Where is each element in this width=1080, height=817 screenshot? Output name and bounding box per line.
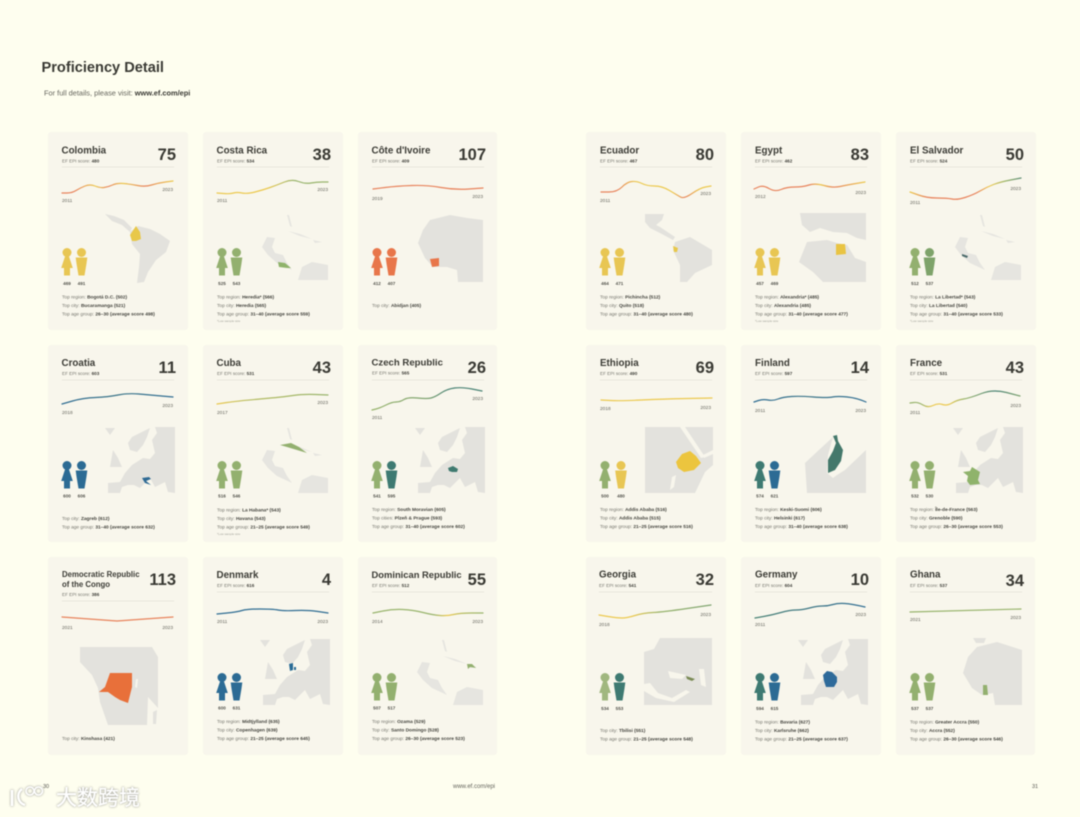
top results bbox=[217, 719, 310, 742]
footer: right page number: 31 bbox=[1032, 784, 1038, 790]
icon: male bbox=[76, 461, 87, 488]
female score: 412 bbox=[373, 281, 381, 286]
top results bbox=[600, 294, 693, 318]
male score: 543 bbox=[233, 281, 241, 286]
female score: 594 bbox=[756, 706, 764, 711]
start year: 2011 bbox=[910, 410, 921, 416]
top results: Top age group: 31–40 (average score 533) bbox=[910, 312, 1003, 318]
start year: 2011 bbox=[910, 200, 921, 206]
EPI score: EF EPI score: 512 bbox=[372, 583, 410, 588]
male score: 491 bbox=[78, 281, 86, 286]
female score: 541 bbox=[373, 494, 381, 498]
top results: Top region: Greater Accra (550) bbox=[910, 720, 980, 726]
rank: 43 bbox=[313, 359, 331, 377]
start year: 2011 bbox=[372, 415, 383, 421]
map: Central Africa bbox=[80, 647, 158, 725]
female score: 532 bbox=[911, 494, 919, 498]
end year: 2023 bbox=[855, 612, 866, 618]
end year: 2023 bbox=[317, 187, 328, 193]
map: Central America bbox=[955, 215, 1021, 280]
end year: 2023 bbox=[855, 408, 866, 414]
card: Ecuador bbox=[586, 132, 726, 330]
watermark text: 大数跨境 bbox=[56, 782, 140, 812]
map: West Africa bbox=[418, 215, 483, 282]
icon: female bbox=[371, 673, 383, 700]
map: South America bbox=[105, 214, 170, 283]
top results bbox=[62, 294, 155, 318]
end year: 2023 bbox=[1010, 615, 1021, 621]
top results: Top region: Pichincha (512) bbox=[600, 294, 661, 300]
top results: Top age group: 31–40 (average score 632) bbox=[62, 524, 155, 530]
country name: France bbox=[910, 358, 943, 369]
rank: 11 bbox=[159, 359, 176, 377]
footer: url: www.ef.com/epi bbox=[452, 784, 495, 790]
top results bbox=[910, 294, 1003, 318]
trend line bbox=[373, 185, 483, 189]
icon: male bbox=[615, 461, 627, 488]
top results: Top region: La Libertad* (543) bbox=[910, 294, 976, 300]
footnote: *Low sample size bbox=[217, 319, 241, 323]
male score: 517 bbox=[388, 706, 396, 710]
start year: 2021 bbox=[62, 625, 73, 631]
icon: female bbox=[909, 673, 921, 700]
top results: Top region: Heredia* (566) bbox=[217, 294, 274, 300]
top results bbox=[755, 720, 848, 742]
start year: 2018 bbox=[599, 622, 610, 628]
footnote: *Low sample size bbox=[755, 319, 779, 323]
trend line bbox=[62, 181, 173, 193]
country name: Germany bbox=[755, 570, 798, 580]
icon: male bbox=[924, 673, 935, 700]
EPI score: EF EPI score: 524 bbox=[910, 158, 948, 164]
rank: 50 bbox=[1006, 146, 1024, 164]
end year: 2023 bbox=[700, 405, 711, 411]
icon: male bbox=[769, 673, 780, 700]
female score: 457 bbox=[756, 281, 764, 286]
start year: 2018 bbox=[62, 410, 73, 416]
start year: 2011 bbox=[600, 198, 611, 204]
icon: female bbox=[371, 461, 383, 488]
top results: Top region: South Moravian (605) bbox=[372, 507, 446, 513]
card: Egypt bbox=[741, 132, 881, 330]
rank: 38 bbox=[313, 146, 331, 164]
map: Europe bbox=[260, 639, 330, 705]
EPI score: EF EPI score: 490 bbox=[600, 371, 638, 376]
trend line bbox=[910, 178, 1021, 199]
start year: 2011 bbox=[755, 622, 766, 628]
icon: female bbox=[61, 461, 73, 488]
female score: 525 bbox=[218, 281, 226, 286]
top results: Top age group: 21–25 (average score 645) bbox=[217, 736, 310, 742]
icon: male bbox=[614, 248, 625, 276]
male score: 407 bbox=[388, 281, 396, 286]
top results: Top region: Keski-Suomi (606) bbox=[755, 507, 822, 513]
rank: 69 bbox=[696, 359, 714, 377]
map: South America bbox=[645, 214, 712, 282]
card: Germany bbox=[741, 557, 881, 755]
start year: 2012 bbox=[755, 194, 766, 200]
card: Ethiopia bbox=[586, 345, 726, 542]
map: Caucasus bbox=[644, 638, 712, 705]
top results: Top city: Abidjan (405) bbox=[372, 303, 421, 309]
top results: Top age group: 31–40 (average score 480) bbox=[600, 312, 693, 318]
country name: Cuba bbox=[216, 358, 242, 369]
map: Europe bbox=[953, 427, 1023, 493]
top results bbox=[755, 507, 848, 530]
male score: 546 bbox=[233, 494, 241, 498]
icon: female bbox=[754, 673, 766, 700]
map: East Africa bbox=[645, 427, 713, 493]
trend line bbox=[601, 398, 712, 401]
trend line bbox=[754, 182, 865, 191]
top results: Top age group: 31–40 (average score 638) bbox=[755, 524, 848, 530]
map: Europe bbox=[105, 427, 175, 493]
trend line bbox=[62, 617, 173, 621]
top results: Top age group: 26–30 (average score 546) bbox=[910, 736, 1003, 742]
icon: female bbox=[909, 248, 921, 276]
trend line bbox=[910, 391, 1020, 407]
map: Central America bbox=[262, 215, 328, 280]
country name bbox=[62, 570, 140, 589]
trend line bbox=[217, 609, 328, 614]
title: Proficiency Detail bbox=[42, 60, 164, 76]
end year: 2023 bbox=[472, 619, 483, 625]
top results: Top region: Île-de-France (563) bbox=[910, 505, 978, 513]
rank: 75 bbox=[158, 146, 176, 164]
EPI score: EF EPI score: 603 bbox=[62, 371, 100, 376]
top results: Top age group: 31–40 (average score 477) bbox=[755, 312, 848, 318]
start year: 2011 bbox=[62, 198, 73, 204]
EPI score: EF EPI score: 565 bbox=[372, 370, 410, 376]
top results: Top city: Kinshasa (421) bbox=[62, 736, 115, 742]
country name: Democratic Republic bbox=[62, 570, 140, 579]
card: Czech Republic bbox=[358, 345, 497, 542]
top results: Top age group: 31–40 (average score 602) bbox=[372, 524, 465, 530]
top results: Top cities: Plzeň & Prague (593) bbox=[372, 516, 443, 522]
female score: 537 bbox=[911, 706, 919, 711]
icon: male bbox=[386, 248, 397, 276]
rank: 32 bbox=[696, 571, 714, 589]
male score: 537 bbox=[926, 281, 934, 286]
top results bbox=[910, 505, 1003, 530]
top results: Top age group: 21–25 (average score 549) bbox=[217, 524, 310, 530]
trend line bbox=[372, 388, 482, 410]
footer: left page number: 30 bbox=[43, 784, 49, 790]
top results bbox=[372, 719, 465, 742]
male score: 553 bbox=[616, 706, 624, 711]
EPI score: EF EPI score: 604 bbox=[755, 583, 793, 588]
end year: 2023 bbox=[1010, 403, 1021, 409]
icon: female bbox=[909, 461, 921, 488]
EPI score: EF EPI score: 386 bbox=[62, 592, 100, 597]
female score: 516 bbox=[218, 494, 226, 498]
country name: Dominican Republic bbox=[372, 569, 462, 580]
start year: 2018 bbox=[600, 406, 611, 412]
end year: 2023 bbox=[317, 619, 328, 625]
card: Croatia bbox=[48, 345, 188, 542]
icon: female bbox=[216, 673, 228, 700]
start year: 2019 bbox=[372, 196, 383, 202]
male score: 615 bbox=[771, 706, 779, 711]
trend line bbox=[754, 396, 866, 402]
top results bbox=[217, 294, 310, 318]
top results: Top age group: 21–25 (average score 548) bbox=[600, 736, 693, 742]
EPI score: EF EPI score: 462 bbox=[755, 158, 793, 164]
trend line bbox=[755, 603, 865, 618]
card: Georgia bbox=[586, 557, 726, 755]
end year: 2023 bbox=[700, 612, 711, 618]
top results: Top region: Addis Ababa (516) bbox=[600, 507, 667, 513]
trend line bbox=[217, 394, 328, 404]
top results: Top city: Accra (552) bbox=[910, 728, 955, 734]
female score: 500 bbox=[601, 494, 609, 498]
top results: Top region: Bogotá D.C. (502) bbox=[62, 294, 127, 300]
female score: 469 bbox=[63, 281, 71, 286]
EPI score: EF EPI score: 534 bbox=[217, 158, 255, 164]
EPI score: EF EPI score: 537 bbox=[910, 583, 948, 588]
top results: Top age group: 26–30 (average score 523) bbox=[372, 736, 465, 742]
top results: Top city: Helsinki (617) bbox=[755, 516, 805, 522]
rank: 43 bbox=[1006, 359, 1024, 377]
card: Côte d'Ivoire bbox=[358, 132, 497, 330]
top results bbox=[372, 507, 465, 530]
map: Caribbean bbox=[417, 640, 483, 705]
icon: male bbox=[386, 673, 397, 700]
icon: female bbox=[61, 248, 73, 276]
top results bbox=[755, 294, 848, 318]
top results: Top city: La Libertad (540) bbox=[910, 303, 968, 309]
top results bbox=[910, 720, 1003, 742]
footnote: *Low sample size bbox=[217, 532, 241, 536]
country name: Egypt bbox=[755, 146, 783, 156]
trend line bbox=[217, 180, 328, 194]
top results: Top age group: 26–30 (average score 553) bbox=[910, 524, 1003, 530]
top results: Top city: Alexandria (485) bbox=[755, 303, 811, 309]
top results: Top city: Karlsruhe (662) bbox=[755, 728, 809, 734]
rank: 14 bbox=[851, 359, 870, 377]
start year: 2021 bbox=[910, 617, 921, 623]
icon: male bbox=[231, 461, 242, 488]
female score: 507 bbox=[373, 706, 381, 710]
map: North Africa bbox=[799, 213, 866, 282]
card: Costa Rica bbox=[203, 132, 343, 330]
map: West Africa bbox=[963, 638, 1022, 705]
country name: Ecuador bbox=[600, 146, 639, 156]
male score: 471 bbox=[616, 281, 624, 286]
start year: 2017 bbox=[217, 410, 228, 416]
icon: male bbox=[924, 461, 935, 488]
female score: 574 bbox=[756, 494, 764, 498]
top results: Top region: Midtjylland (635) bbox=[217, 719, 280, 725]
card: Dominican Republic bbox=[358, 557, 497, 755]
icon: male bbox=[231, 248, 242, 276]
icon: male bbox=[231, 673, 242, 700]
rank: 4 bbox=[322, 571, 332, 589]
male score: 631 bbox=[233, 706, 241, 710]
trend line bbox=[599, 605, 711, 618]
end year: 2023 bbox=[162, 187, 173, 193]
rank: 26 bbox=[468, 359, 486, 377]
rank: 34 bbox=[1006, 572, 1025, 590]
top results: Top city: Havana (543) bbox=[217, 516, 266, 522]
EPI score: EF EPI score: 541 bbox=[599, 583, 637, 588]
icon: female bbox=[599, 461, 611, 488]
map: Europe bbox=[415, 427, 485, 493]
end year: 2023 bbox=[1010, 186, 1021, 192]
female score: 600 bbox=[63, 494, 71, 498]
country name: Croatia bbox=[62, 358, 96, 369]
footnote: *Low sample size bbox=[910, 319, 934, 323]
rank: 107 bbox=[458, 146, 486, 164]
icon: male bbox=[769, 248, 780, 276]
top results: Top age group: 21–25 (average score 637) bbox=[755, 736, 848, 742]
country name: of the Congo bbox=[62, 580, 110, 589]
EPI score: EF EPI score: 467 bbox=[600, 158, 638, 164]
country name: Costa Rica bbox=[216, 146, 268, 156]
top results: Top age group: 31–40 (average score 559) bbox=[217, 312, 310, 318]
end year: 2023 bbox=[472, 194, 483, 200]
start year: 2011 bbox=[217, 619, 228, 625]
start year: 2011 bbox=[755, 408, 766, 414]
trend line bbox=[910, 609, 1021, 612]
trend line bbox=[373, 609, 483, 616]
top results: Top region: La Habana* (543) bbox=[217, 508, 281, 514]
EPI score: EF EPI score: 409 bbox=[372, 158, 410, 164]
card: Ghana bbox=[896, 557, 1035, 755]
icon: male bbox=[614, 673, 625, 700]
EPI score: EF EPI score: 616 bbox=[217, 583, 255, 588]
icon: male bbox=[76, 248, 87, 276]
rank: 83 bbox=[851, 146, 869, 164]
icon: female bbox=[216, 248, 228, 276]
female score: 464 bbox=[601, 281, 609, 286]
end year: 2023 bbox=[700, 191, 711, 197]
male score: 595 bbox=[388, 494, 396, 498]
female score: 512 bbox=[911, 281, 919, 286]
male score: 621 bbox=[771, 494, 779, 498]
trend line bbox=[601, 181, 711, 198]
end year: 2023 bbox=[162, 625, 173, 631]
top results: Top city: Zagreb (612) bbox=[62, 516, 110, 522]
top results: Top region: Ozama (529) bbox=[372, 719, 426, 725]
icon: female bbox=[599, 673, 611, 700]
female score: 600 bbox=[218, 706, 226, 710]
male score: 530 bbox=[926, 494, 934, 498]
top results: Top city: Heredia (565) bbox=[217, 303, 266, 309]
start year: 2011 bbox=[217, 198, 228, 204]
icon: male bbox=[924, 248, 935, 276]
end year: 2023 bbox=[162, 403, 173, 409]
top results: Top city: Santo Domingo (528) bbox=[372, 728, 439, 734]
country name: Czech Republic bbox=[372, 358, 444, 368]
top results: Top region: Bavaria (627) bbox=[755, 720, 810, 726]
country name: Georgia bbox=[599, 570, 637, 580]
top results: Top city: Tbilisi (551) bbox=[600, 728, 646, 734]
rank: 55 bbox=[468, 571, 486, 589]
EPI score: EF EPI score: 531 bbox=[910, 371, 948, 376]
icon: female bbox=[599, 248, 611, 276]
female score: 534 bbox=[601, 706, 609, 711]
top results bbox=[600, 507, 693, 530]
card: Colombia bbox=[48, 132, 188, 330]
map: Europe bbox=[798, 639, 868, 705]
card: Cuba bbox=[203, 345, 343, 542]
top results: Top city: Copenhagen (639) bbox=[217, 728, 278, 734]
card: Democratic Republic of the Congo bbox=[48, 557, 188, 755]
EPI score: EF EPI score: 531 bbox=[217, 371, 255, 376]
subtitle: For full details, please visit: www.ef.com/epi bbox=[44, 88, 190, 98]
icon: female bbox=[216, 461, 228, 488]
rank: 80 bbox=[696, 146, 714, 164]
end year: 2023 bbox=[855, 190, 866, 196]
card: Denmark bbox=[203, 557, 343, 755]
card: France bbox=[896, 345, 1036, 542]
top results: Top city: Quito (518) bbox=[600, 303, 644, 309]
male score: 469 bbox=[771, 281, 779, 286]
country name: Finland bbox=[755, 358, 790, 369]
country name: El Salvador bbox=[910, 146, 964, 156]
top results bbox=[217, 508, 310, 530]
country name: Colombia bbox=[62, 146, 107, 156]
top results: Top city: Bucaramanga (521) bbox=[62, 303, 126, 309]
icon: watermark logo bbox=[12, 787, 42, 806]
country name: Ghana bbox=[910, 570, 941, 580]
icon: male bbox=[386, 461, 397, 488]
top results: Top age group: 26–30 (average score 498) bbox=[62, 312, 155, 318]
icon: female bbox=[754, 461, 766, 488]
top results: Top city: Addis Ababa (515) bbox=[600, 516, 661, 522]
map: Caribbean bbox=[262, 428, 328, 493]
EPI score: EF EPI score: 597 bbox=[755, 371, 793, 376]
country name: Ethiopia bbox=[600, 358, 639, 369]
country name: Denmark bbox=[216, 570, 259, 581]
end year: 2023 bbox=[472, 396, 483, 402]
icon: male bbox=[769, 461, 780, 488]
EPI score: EF EPI score: 480 bbox=[62, 158, 100, 164]
start year: 2014 bbox=[372, 619, 383, 625]
trend line bbox=[62, 394, 173, 404]
top results: Top age group: 21–25 (average score 516) bbox=[600, 524, 693, 530]
card: El Salvador bbox=[896, 132, 1036, 330]
icon: female bbox=[754, 248, 766, 276]
top results bbox=[62, 516, 155, 530]
card: Finland bbox=[741, 345, 881, 542]
top results bbox=[600, 728, 693, 742]
male score: 480 bbox=[617, 494, 625, 498]
end year: 2023 bbox=[317, 400, 328, 406]
male score: 606 bbox=[78, 494, 86, 498]
rank: 10 bbox=[851, 571, 869, 589]
male score: 537 bbox=[926, 706, 934, 711]
country name: Côte d'Ivoire bbox=[372, 146, 431, 156]
rank: 113 bbox=[149, 571, 176, 589]
map: Northern Europe bbox=[805, 435, 866, 493]
top results: Top region: Alexandria* (485) bbox=[755, 294, 819, 300]
icon: female bbox=[371, 248, 383, 276]
top results: Top city: Grenoble (590) bbox=[910, 516, 963, 522]
